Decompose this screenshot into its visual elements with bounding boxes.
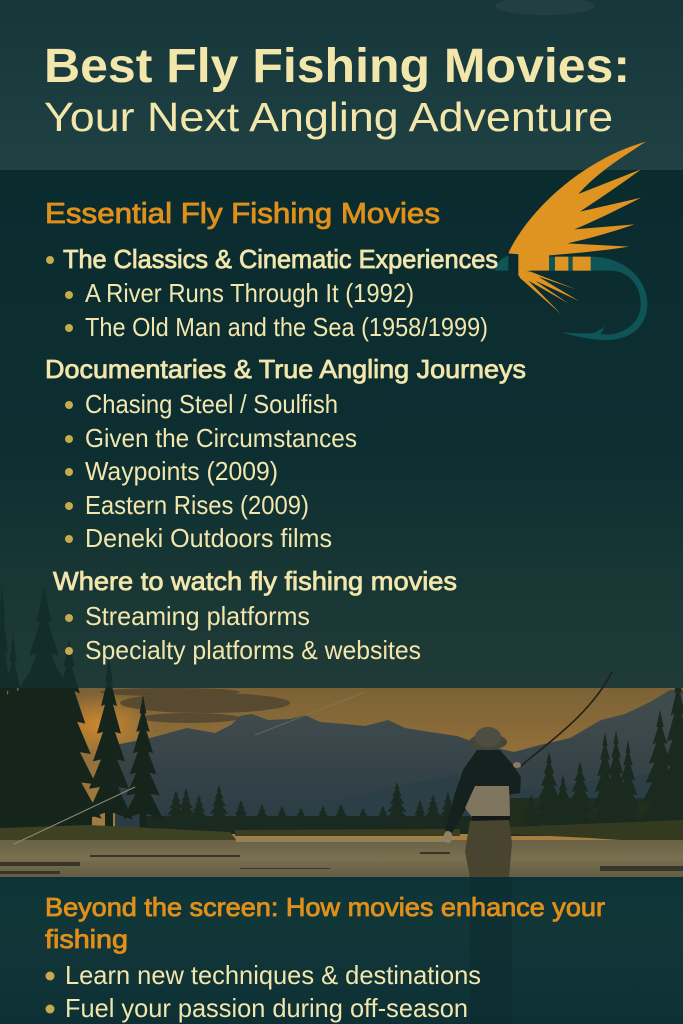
list: where to watch: Specialty platforms & websites xyxy=(85,635,421,665)
jacket xyxy=(445,750,521,833)
hackle fibres xyxy=(518,271,579,314)
icon: fly fishing lure with hook xyxy=(495,142,647,340)
list: classics: The Old Man and the Sea (1958/1999) xyxy=(85,312,488,342)
list: classics: A River Runs Through It (1992) xyxy=(85,278,414,308)
list: where to watch: Streaming platforms xyxy=(85,601,310,631)
belt xyxy=(472,816,510,821)
list: documentaries: Eastern Rises (2009) xyxy=(85,490,309,520)
background scene: mountain river at dusk xyxy=(0,528,683,877)
list: benefits: Learn new techniques & destinations xyxy=(65,960,481,990)
list: benefits xyxy=(46,960,481,1023)
panel: beyond the screen: fishing xyxy=(45,924,128,954)
section: essential fly fishing movies xyxy=(45,198,526,665)
list: benefits: Fuel your passion during off-season xyxy=(65,993,468,1023)
vest xyxy=(465,786,510,817)
heading: Essential Fly Fishing Movies xyxy=(45,198,440,230)
title: Best Fly Fishing Movies: xyxy=(44,40,630,93)
grassy bank xyxy=(0,825,238,844)
forest showing through the lower panel xyxy=(0,170,683,688)
fishing rod xyxy=(521,672,612,766)
panel: beyond the screen xyxy=(0,877,683,1024)
subtitle: Your Next Angling Adventure xyxy=(44,94,613,140)
hat xyxy=(469,734,507,750)
list: documentaries: Given the Circumstances xyxy=(85,423,357,453)
hand xyxy=(444,831,452,843)
body xyxy=(518,253,549,276)
fly line xyxy=(14,787,135,844)
sky xyxy=(0,688,683,840)
list: documentaries xyxy=(65,389,357,553)
list: documentaries: Chasing Steel / Soulfish xyxy=(85,389,338,419)
tree line xyxy=(163,782,460,834)
heading: Beyond the screen: How movies enhance your xyxy=(45,892,605,922)
wing xyxy=(508,142,646,256)
subheading: documentaries: Documentaries & True Angling Journeys xyxy=(45,354,526,384)
list: documentaries: Waypoints (2009) xyxy=(85,456,278,486)
hook xyxy=(548,257,647,340)
header band xyxy=(0,0,683,170)
far mountain range xyxy=(115,690,683,830)
subheading: classics: The Classics & Cinematic Experiences xyxy=(63,244,498,274)
fisherman reflection xyxy=(470,877,512,1024)
list: classics xyxy=(65,278,488,342)
waders xyxy=(465,820,512,877)
river xyxy=(0,840,683,877)
right trees xyxy=(510,670,683,836)
clouds xyxy=(100,688,290,723)
list: where to watch xyxy=(65,601,421,665)
left forest xyxy=(0,688,162,828)
subheading: where to watch: Where to watch fly fishing movies xyxy=(53,566,457,596)
fisherman casting in the river xyxy=(444,672,612,877)
near ridge xyxy=(275,775,470,830)
list: documentaries: Deneki Outdoors films xyxy=(85,523,332,553)
